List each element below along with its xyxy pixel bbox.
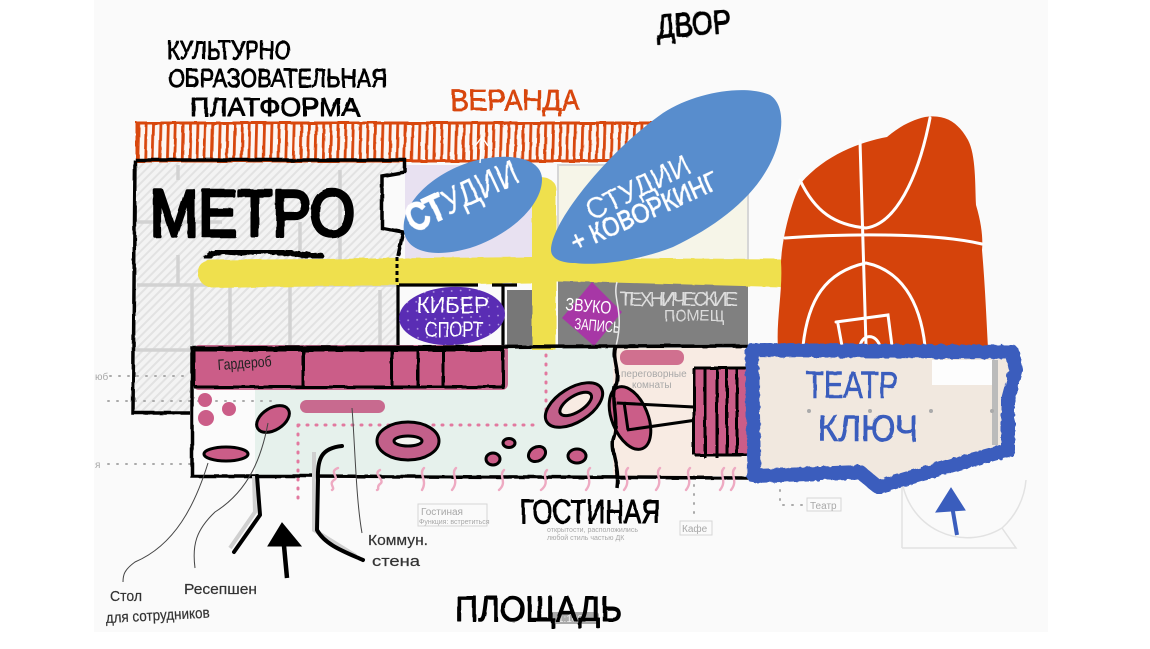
plan label: Гостиная: Функция: встретиться: [419, 519, 490, 526]
label: кибер: КИБЕР: [417, 292, 489, 318]
entrance wall shadows: [230, 452, 356, 556]
label: студии: СТУДИИ: [581, 149, 696, 227]
title: культурно-образовательная платформа: [167, 35, 387, 122]
donut seat large: [377, 422, 439, 460]
small seats: [486, 438, 586, 465]
theatre side room: [932, 360, 992, 385]
inner room walls: [398, 285, 517, 348]
room: звукозапись: [562, 282, 622, 346]
label: площадь: ПЛОЩАДЬ: [455, 590, 622, 629]
communal wall pink bar: [300, 400, 385, 413]
label: технические помещения: ТЕХНИЧЕСКИЕ: [620, 289, 738, 311]
label: коворкинг: + КОВОРКИНГ: [566, 166, 723, 257]
court lines: [785, 118, 982, 346]
pink blob: meeting rooms: [620, 350, 684, 365]
plan label: переговорные комнаты: переговорные: [621, 369, 687, 380]
seating tribune grid: [694, 368, 750, 458]
panel: upper rooms: [558, 165, 748, 260]
plan label: description: открытости, расположились: [547, 527, 638, 534]
oval stage seat: [601, 381, 752, 455]
thin white arrow: [475, 137, 488, 163]
plan label: scale: 1:100: [558, 614, 583, 625]
plan: theatre entrance outline: [902, 480, 1026, 548]
panel: studio rooms: [405, 165, 535, 260]
plan label: description: любой стиль частью ДК: [547, 534, 625, 542]
label: двор: ДВОР: [655, 3, 732, 45]
title: культурно-образовательная платформа: ПЛАТФОРМА: [190, 92, 361, 122]
label: ключ: КЛЮЧ: [818, 408, 918, 449]
wardrobe pink block: [193, 345, 508, 390]
arrow: theatre entrance: [936, 488, 965, 535]
note: коммуникационная стена: стена: [372, 553, 421, 570]
reception desk: [252, 400, 294, 438]
blue blob: studios: [399, 137, 542, 253]
entrance walls: [234, 446, 363, 560]
leader lines: [123, 408, 362, 582]
plan label: side tags: юб: [95, 371, 108, 383]
plan label: Кафе: Кафе: [682, 523, 708, 535]
block dividers: [194, 350, 504, 387]
note: коммуникационная стена: [368, 532, 428, 570]
room divider line: [616, 282, 619, 346]
label: технические помещения: ПОМЕЩ: [664, 308, 724, 325]
arrow: main entrance: [268, 523, 301, 578]
plan dotted routes: [108, 125, 808, 520]
living room outline: [192, 346, 750, 488]
label: технические помещения: [620, 289, 738, 325]
employee table: [204, 447, 248, 461]
plan label: side tags: я: [95, 460, 100, 471]
label: метро: МЕТРО: [150, 176, 355, 250]
pink squiggles: facade openings: [332, 468, 735, 490]
label: театр: ТЕАТР: [806, 365, 898, 407]
plan label: переговорные комнаты: комнаты: [632, 380, 672, 391]
title: культурно-образовательная платформа: ОБРАЗОВАТЕЛЬНАЯ: [168, 63, 387, 93]
metro door dashes: [396, 257, 398, 285]
employee table circles: [198, 393, 236, 426]
veranda hatched strip: [137, 123, 659, 161]
title: культурно-образовательная платформа: КУЛЬТУРНО: [167, 35, 291, 65]
yellow circulation axes: [198, 178, 782, 350]
plan label: Гостиная: Гостиная: [421, 507, 463, 518]
plan label: Кафе: [680, 521, 712, 535]
squiggle under metro: [207, 251, 321, 258]
label: спорт: СПОРТ: [425, 317, 483, 342]
plan label: description: [547, 527, 638, 542]
label: запись: ЗАПИСЬ: [574, 316, 621, 337]
plan label: Театр: Театр: [810, 501, 837, 512]
metro outline: [133, 160, 405, 413]
plan label: Гостиная: [418, 504, 490, 526]
label: студии: СТУДИИ: [399, 151, 525, 239]
plan label: side tags: [95, 371, 108, 471]
label: звуко: ЗВУКО: [565, 294, 612, 318]
panel: metro floor plan: [135, 160, 405, 412]
panel: technical rooms: [507, 281, 748, 348]
room: киберспорт: [398, 284, 506, 348]
theatre wall bar: [992, 360, 998, 445]
note: стол для сотрудников: Стол: [110, 588, 142, 605]
basketball court: [778, 116, 988, 348]
theatre hall: [752, 350, 1016, 487]
plan label: переговорные комнаты: [621, 369, 687, 391]
label: гостиная: ГОСТИНАЯ: [520, 493, 660, 530]
label: гардероб: Гардероб: [217, 353, 272, 374]
note: стол для сотрудников: для сотрудников: [105, 605, 210, 627]
panel: living room floor: [192, 348, 749, 476]
donut seat upper: [538, 374, 610, 436]
note: коммуникационная стена: Коммун.: [368, 532, 428, 549]
plan label: scale: [550, 612, 599, 625]
label: веранда: ВЕРАНДА: [450, 85, 581, 117]
plan label: Театр: [807, 498, 841, 512]
note: стол для сотрудников: [105, 588, 210, 627]
theatre column dots: [807, 409, 994, 413]
blue blob: studios and coworking: [551, 90, 781, 264]
note: ресепшен: Ресепшен: [184, 581, 257, 598]
